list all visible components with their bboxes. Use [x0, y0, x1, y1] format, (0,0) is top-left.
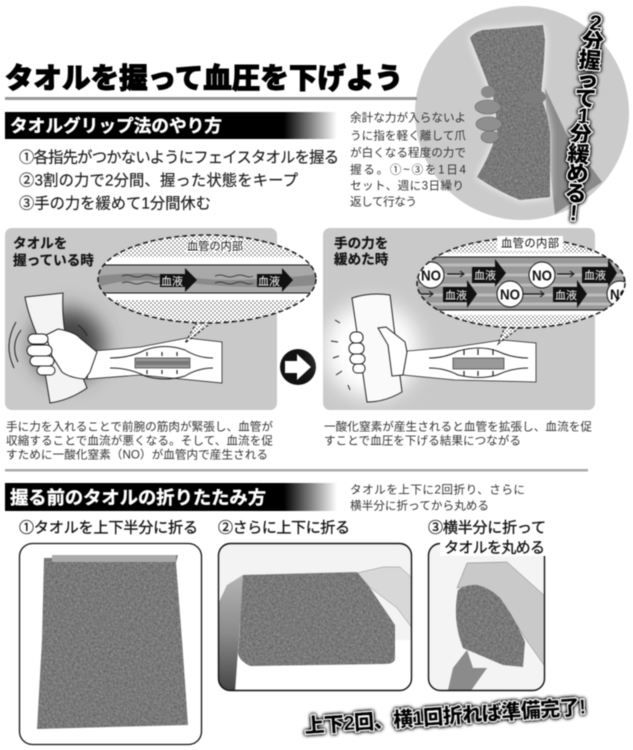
title: タオルを握って血圧を下げよう [5, 63, 403, 95]
side note: が白くなる程度の力で [350, 146, 466, 160]
panel heading: when relaxed: 手の力を [334, 235, 388, 251]
muscle and vessel cross-section [110, 346, 213, 379]
muscle and vessel cross-section [429, 348, 528, 378]
panel: relaxing the hand [323, 228, 633, 410]
callout bubble: inside of blood vessel, dilated with NO: NO [500, 286, 520, 304]
title rule [5, 97, 417, 100]
step 3 label: タオルを丸める [444, 540, 545, 556]
caption: left panel: 収縮することで血流が悪くなる。そして、血流を促 [6, 434, 273, 448]
panel heading: when relaxed [334, 235, 389, 267]
panel heading: while gripping [13, 236, 94, 268]
callout bubble: inside of blood vessel, dilated with NO: NO [532, 268, 552, 284]
step 3 label: ③横半分に折って [428, 520, 546, 536]
panel: gripping the towel [5, 228, 320, 410]
callout bubble: inside of blood vessel, constricted: 血管の内部 [187, 239, 243, 253]
photo 2: folding towel with two hands [218, 543, 412, 692]
folding summary note [350, 482, 525, 512]
callout bubble: inside of blood vessel, dilated with NO: NO [610, 286, 630, 304]
panel heading: while gripping: タオルを [13, 236, 67, 251]
callout bubble: inside of blood vessel, dilated with NO: NO [421, 268, 441, 284]
step 2 label: ②さらに上下に折る [218, 520, 350, 536]
step 1 label: ①タオルを上下半分に折る [19, 520, 198, 536]
photo 3: rolling the towel [428, 543, 546, 692]
callout bubble: inside of blood vessel, constricted: 血液 [161, 274, 183, 288]
callout bubble: inside of blood vessel, constricted: 血液 [258, 274, 280, 288]
hero photo: hand gripping towel [415, 6, 629, 220]
banner: ready after two vertical and one horizontal fold: 上下2回、横1回折れば準備完了! [304, 694, 587, 738]
callout bubble: inside of blood vessel, dilated with NO: 血液 [555, 288, 577, 302]
callout bubble: inside of blood vessel, dilated with NO: 血管の内部 [501, 236, 559, 250]
step 3 label [428, 520, 550, 556]
icon: right arrow between panels [280, 349, 316, 385]
side note: うに指を軽く離して爪 [350, 128, 466, 142]
section rule [5, 469, 588, 472]
section heading: folding the towel [5, 483, 337, 511]
caption: left panel: 手に力を入れることで前腕の筋肉が緊張し、血管が [6, 420, 273, 434]
callout bubble: inside of blood vessel, constricted [95, 235, 320, 343]
side note: セット、週に3日繰り [350, 178, 464, 192]
numbered steps [19, 150, 339, 212]
section heading: towel grip method [5, 112, 337, 139]
folding summary note: タオルを上下に2回折り、さらに [350, 482, 525, 496]
caption: right panel [324, 420, 592, 448]
photo 1: unfolded towel [20, 544, 202, 744]
callout bubble: inside of blood vessel, dilated with NO: 血液 [474, 268, 496, 282]
folding summary note: 横半分に折ってから丸める [350, 498, 489, 512]
caption: left panel: すために一酸化窒素（NO）が血管内で産生される [6, 448, 268, 462]
caption: right panel: 一酸化窒素が産生されると血管を拡張し、血流を促 [324, 420, 592, 434]
section heading: towel grip method: タオルグリップ法のやり方 [10, 115, 222, 136]
callout bubble: inside of blood vessel, dilated with NO [415, 236, 633, 344]
panel heading: while gripping: 握っている時 [13, 252, 94, 268]
vertical callout: grip 2 minutes, relax 1 minute: 2分握って1分緩める! [564, 10, 605, 226]
callout bubble: inside of blood vessel, dilated with NO: 血液 [445, 288, 467, 302]
side note: 余計な力が入らないよ [350, 110, 466, 124]
numbered steps: ②3割の力で2分間、握った状態をキープ [19, 172, 299, 190]
icon: relaxed hand and towel [324, 294, 536, 402]
section heading: folding the towel: 握る前のタオルの折りたたみ方 [10, 487, 266, 508]
numbered steps: ③手の力を緩めて1分間休む [19, 196, 211, 212]
side note [350, 110, 467, 208]
icon: gripping hand and towel [9, 293, 222, 403]
panel heading: when relaxed: 緩めた時 [334, 251, 389, 267]
side note: 返して行なう [350, 196, 417, 208]
numbered steps: ①各指先がつかないようにフェイスタオルを握る [19, 150, 339, 166]
callout bubble: inside of blood vessel, dilated with NO: 血液 [584, 268, 606, 282]
caption: left panel [6, 420, 273, 462]
side note: 握る。①~③を1日4 [350, 162, 467, 176]
caption: right panel: すことで血圧を下げる結果につながる [324, 434, 521, 448]
